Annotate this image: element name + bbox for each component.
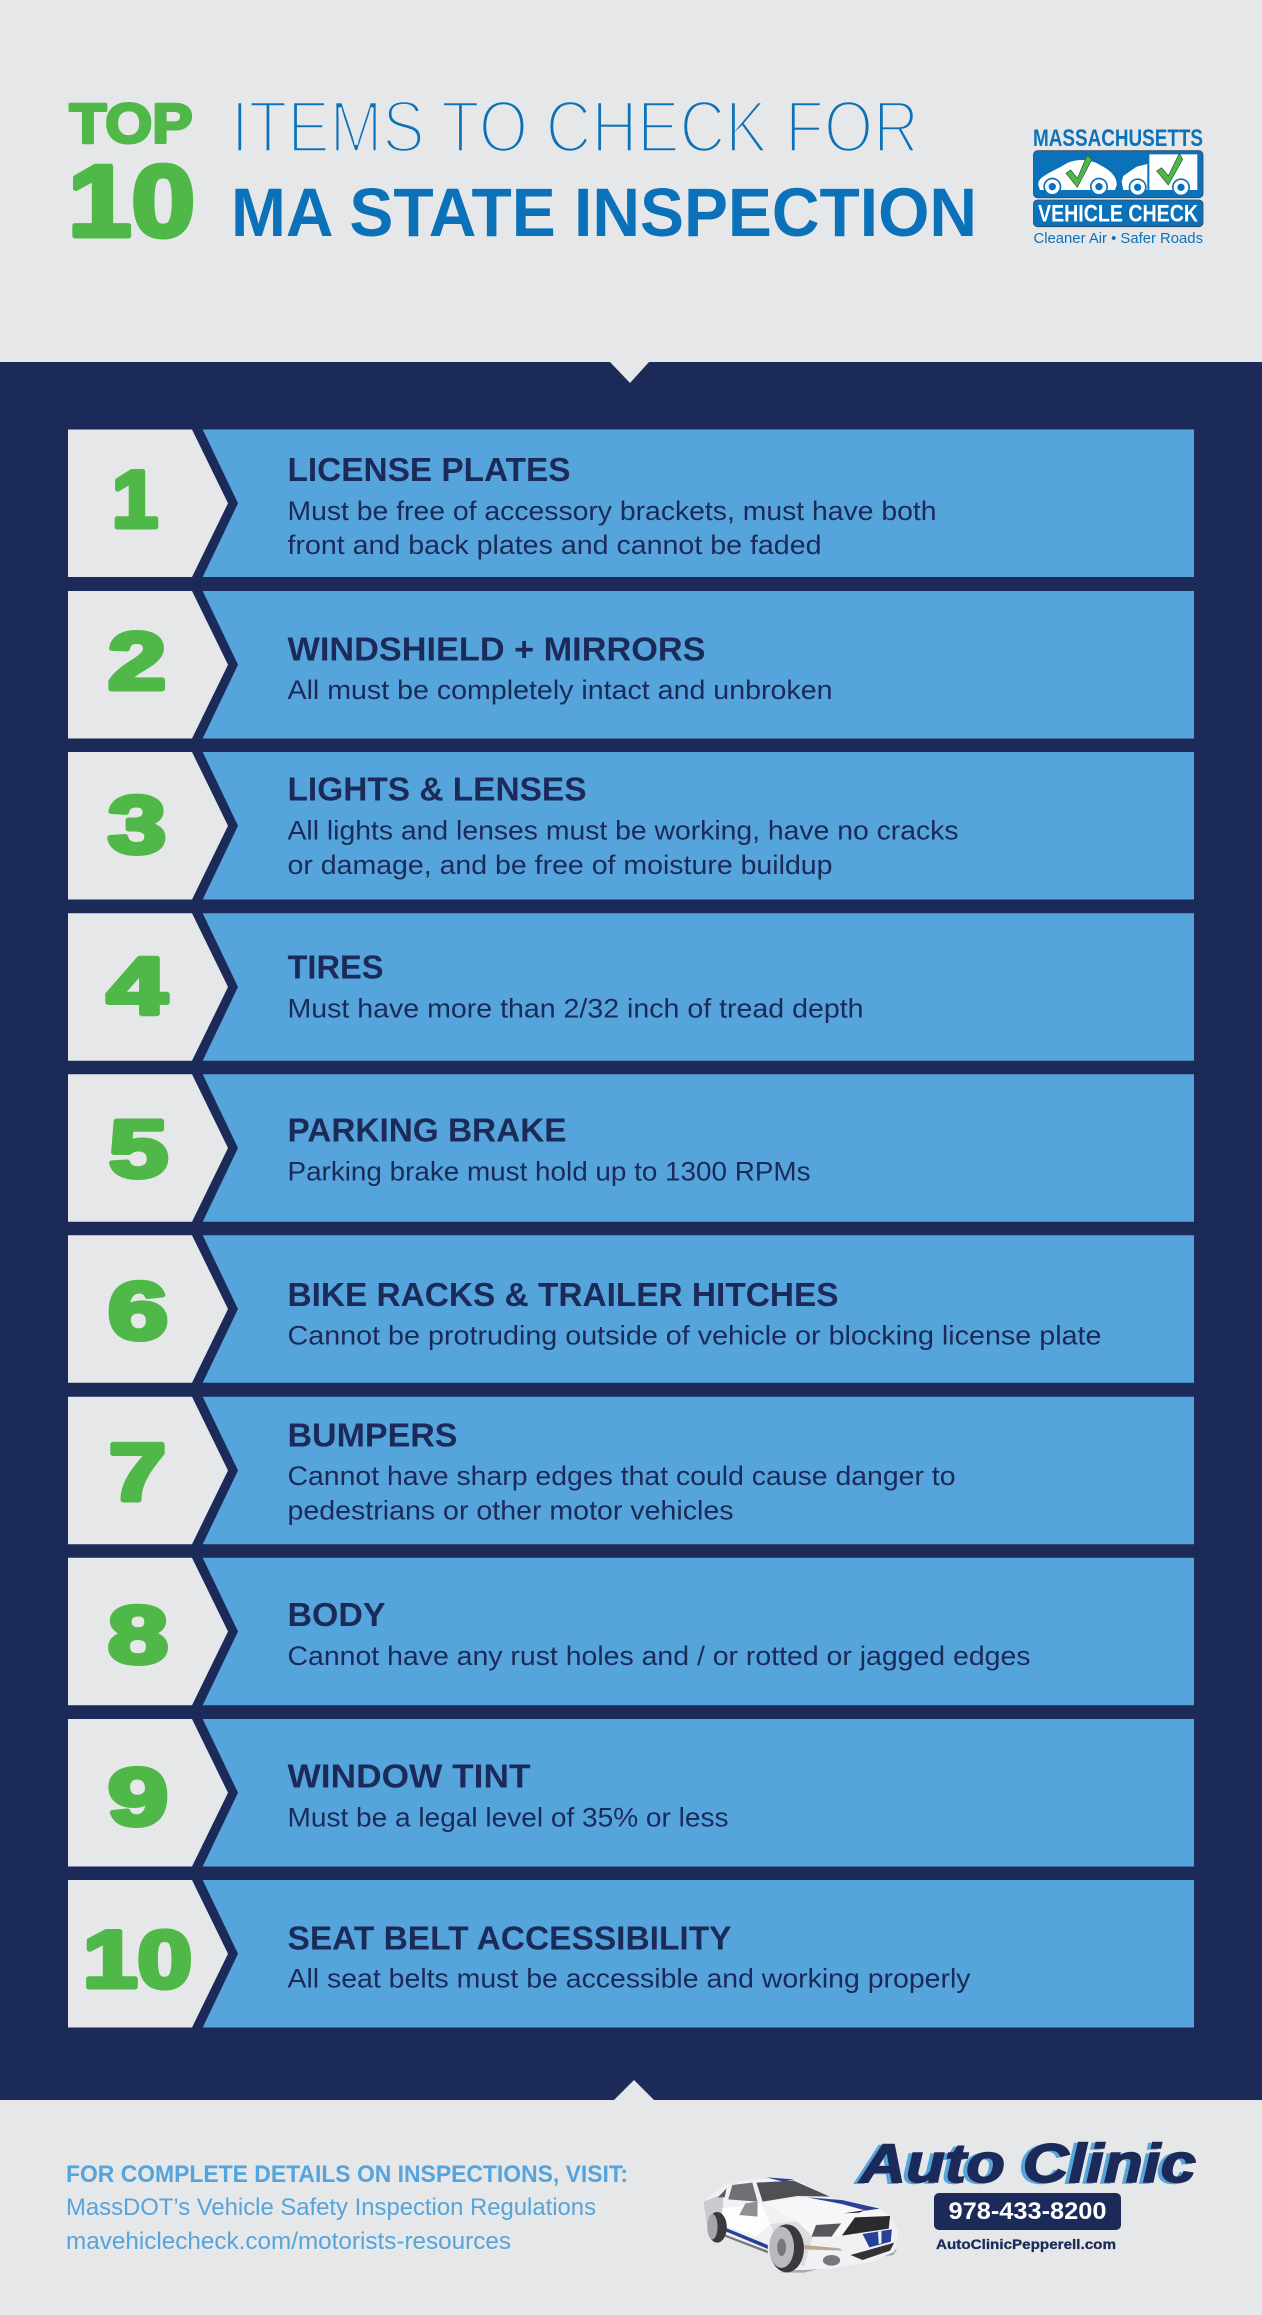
- footer notch arrow: [614, 2080, 654, 2100]
- description: All must be completely intact and unbroken: [288, 675, 832, 705]
- illustration: silver muscle car: [703, 2177, 898, 2273]
- item 5: parking brake: [68, 1074, 1194, 1222]
- description: All lights and lenses must be working, have no cracks: [288, 815, 958, 845]
- number 10: 10: [83, 1915, 192, 2005]
- title line: MA state inspection: MA STATE INSPECTION: [231, 174, 977, 251]
- number 2: 2: [108, 617, 166, 707]
- number 8: 8: [108, 1590, 168, 1680]
- description: Must be free of accessory brackets, must have both: [288, 496, 936, 526]
- title: top 10: TOP: [70, 92, 192, 154]
- heading: PARKING BRAKE: [288, 1111, 566, 1148]
- logo: Auto Clinic: Auto Clinic: [858, 2132, 1196, 2194]
- number 3: 3: [108, 780, 166, 870]
- number 7: 7: [109, 1428, 166, 1518]
- description: Cannot have any rust holes and / or rotted or jagged edges: [288, 1641, 1030, 1671]
- header title: [68, 87, 977, 258]
- heading: WINDSHIELD + MIRRORS: [288, 631, 706, 668]
- panel: navy checklist background: [0, 362, 1262, 2100]
- logo: Massachusetts Vehicle Check: MASSACHUSETTS: [1033, 125, 1203, 152]
- description: Cannot be protruding outside of vehicle or blocking license plate: [288, 1321, 1102, 1351]
- item 3: lights and lenses: [68, 752, 1194, 900]
- item 10: seat belt accessibility: [68, 1880, 1194, 2028]
- item 8: body: [68, 1558, 1194, 1705]
- footer details text: FOR COMPLETE DETAILS ON INSPECTIONS, VISIT:: [66, 2161, 628, 2188]
- number 6: 6: [108, 1266, 168, 1356]
- item 7: bumpers: pedestrians or other motor vehicles: [288, 1495, 734, 1525]
- item 6: bike racks and trailer hitches: [68, 1235, 1194, 1383]
- heading: BIKE RACKS & TRAILER HITCHES: [288, 1276, 838, 1313]
- heading: BODY: [288, 1596, 386, 1633]
- number 5: 5: [109, 1104, 168, 1194]
- footer details text: MassDOT’s Vehicle Safety Inspection Regulations: [66, 2194, 596, 2221]
- number 1: 1: [112, 455, 158, 545]
- title: top 10: [68, 92, 195, 258]
- title: top 10: 10: [68, 146, 195, 258]
- heading: TIRES: [288, 949, 384, 986]
- description: Parking brake must hold up to 1300 RPMs: [288, 1157, 810, 1187]
- phone number badge: 978-433-8200: [948, 2198, 1106, 2225]
- logo: Auto Clinic: Auto Clinic: [854, 2133, 1192, 2195]
- heading: SEAT BELT ACCESSIBILITY: [288, 1919, 732, 1956]
- item 3: lights and lenses: or damage, and be free of moisture buildup: [288, 850, 832, 880]
- heading: BUMPERS: [288, 1416, 458, 1453]
- footer details text: mavehiclecheck.com/motorists-resources: [66, 2228, 511, 2255]
- logo: Massachusetts Vehicle Check: [1033, 125, 1203, 247]
- logo: Massachusetts Vehicle Check: VEHICLE CHECK: [1038, 201, 1199, 228]
- logo: Massachusetts Vehicle Check: Cleaner Air • Safer Roads: [1034, 230, 1203, 247]
- heading: LICENSE PLATES: [288, 451, 570, 488]
- number 9: 9: [108, 1752, 168, 1842]
- item 9: window tint: [68, 1719, 1194, 1866]
- description: Cannot have sharp edges that could cause danger to: [288, 1461, 956, 1491]
- phone number badge: [934, 2193, 1121, 2230]
- item 4: tires: [68, 913, 1194, 1061]
- item 2: windshield + mirrors: [68, 591, 1194, 738]
- item 1: license plates: [68, 430, 1194, 577]
- number 4: 4: [107, 942, 167, 1032]
- description: All seat belts must be accessible and working properly: [288, 1964, 971, 1994]
- heading: WINDOW TINT: [288, 1757, 530, 1794]
- item 7: bumpers: [68, 1397, 1194, 1544]
- website: AutoClinicPepperell.com: [936, 2236, 1116, 2252]
- title line: items to check for: ITEMS TO CHECK FOR: [231, 87, 919, 168]
- description: Must have more than 2/32 inch of tread depth: [288, 994, 864, 1024]
- description: Must be a legal level of 35% or less: [288, 1802, 728, 1832]
- heading: LIGHTS & LENSES: [288, 771, 586, 808]
- item 1: license plates: front and back plates and cannot be faded: [288, 530, 822, 560]
- footer details text: [66, 2161, 628, 2255]
